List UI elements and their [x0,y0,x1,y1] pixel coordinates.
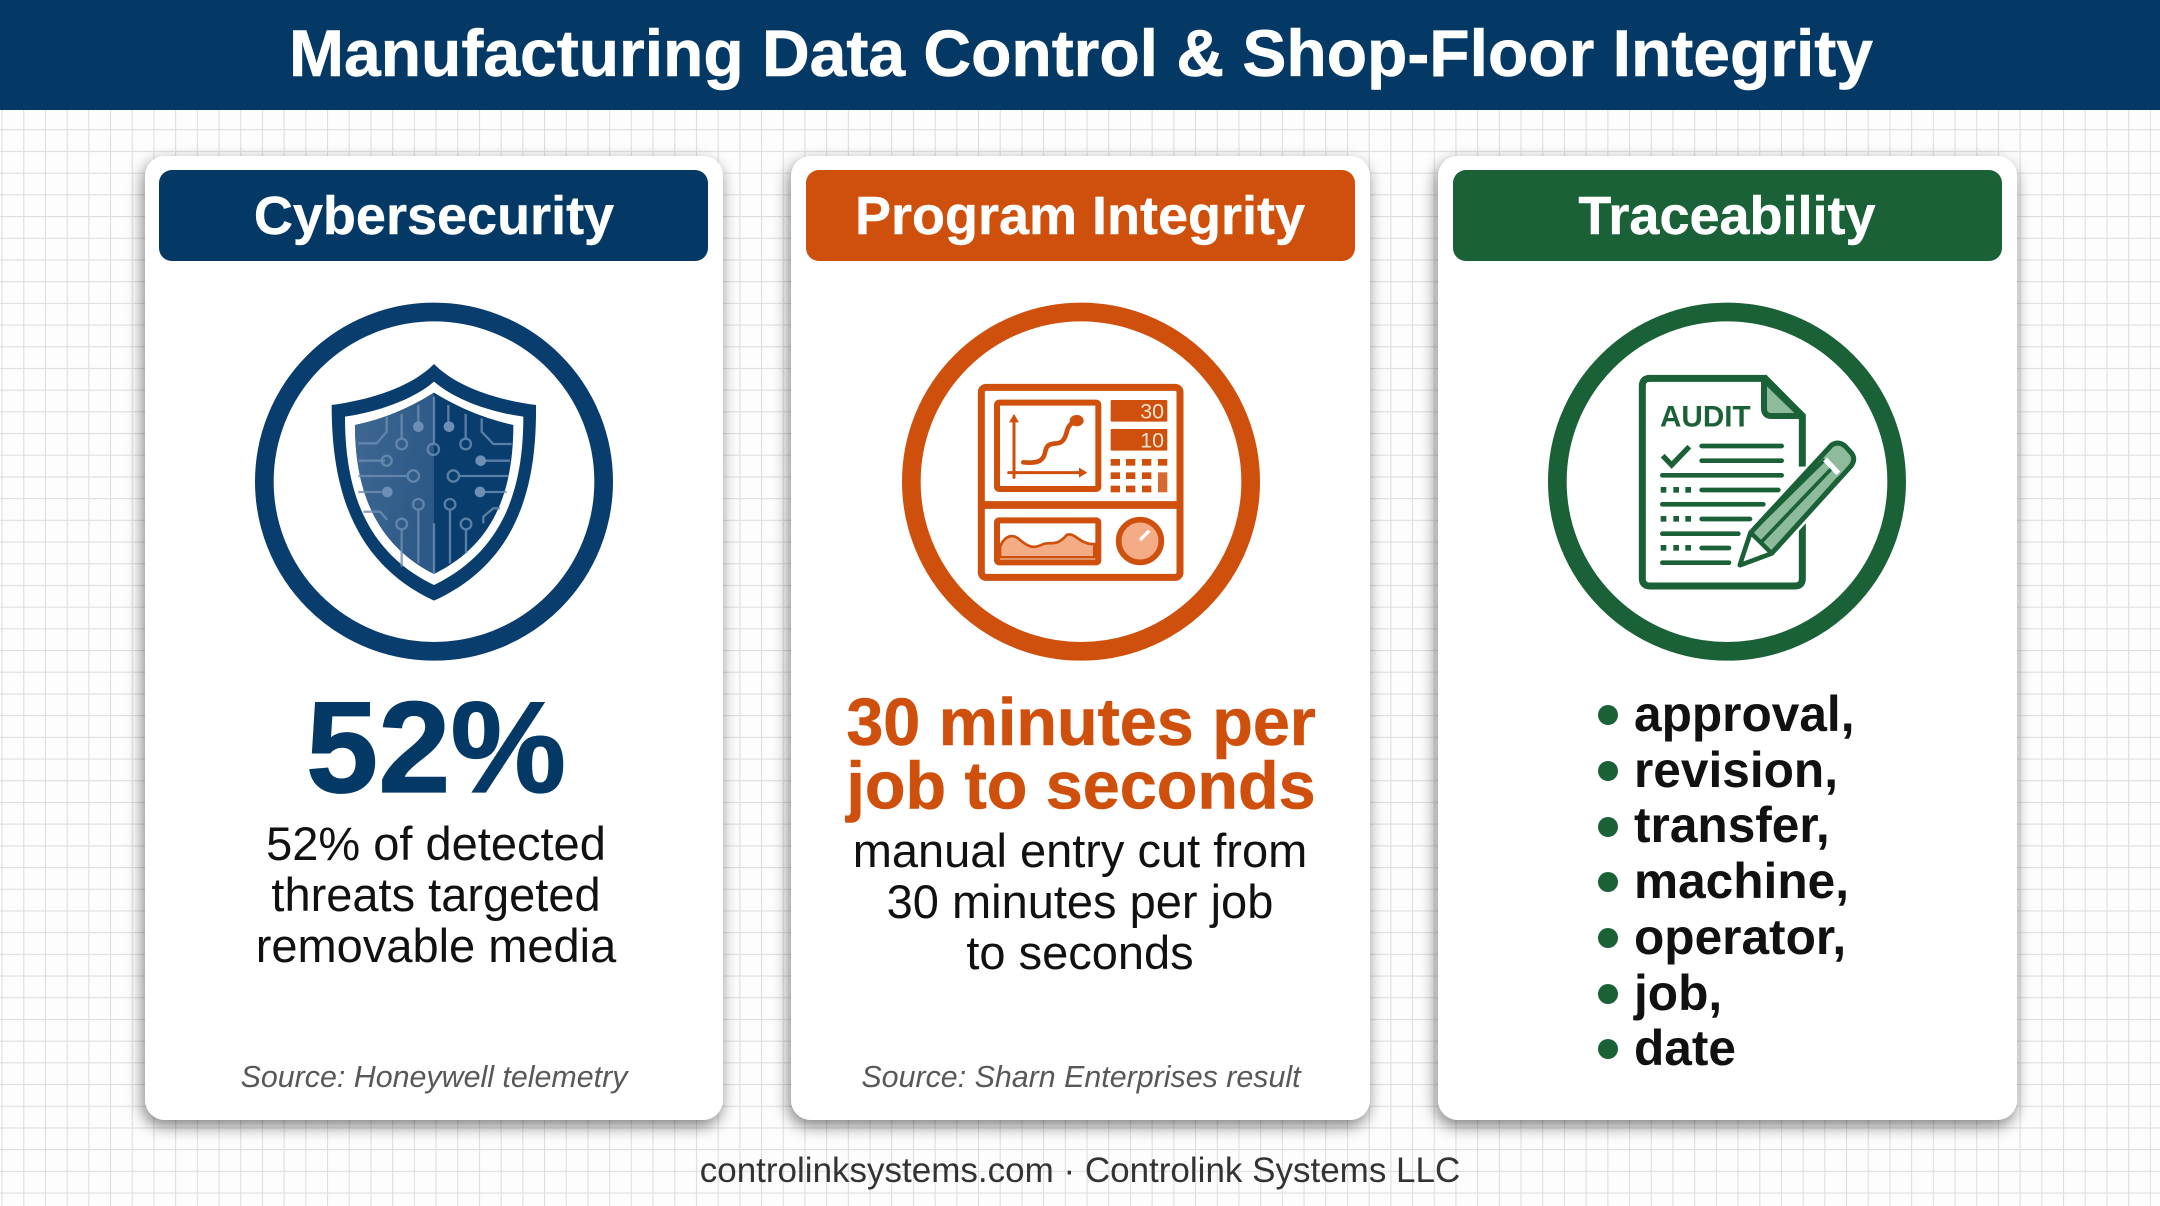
source: Source: Sharn Enterprises result [861,1060,1302,1094]
key stat: 30 minutes per [846,686,1316,760]
heading: Traceability: Traceability [1578,186,1876,246]
title: Manufacturing Data Control & Shop-Floor Integrity [289,16,1873,90]
description: to seconds [966,926,1194,979]
panel: Cybersecurity [145,156,723,1120]
traceability fields list [1598,686,1854,1076]
key stat: job to seconds [844,750,1316,824]
icon: shield in ring [264,312,604,651]
description: 52% of detected [266,817,606,870]
panel: Traceability [1438,156,2017,1120]
traceability fields list: machine, [1634,853,1849,909]
traceability fields list: approval, [1634,686,1854,742]
source: Source: Honeywell telemetry [241,1060,629,1094]
traceability fields list: transfer, [1634,797,1830,853]
display readouts [1140,400,1164,453]
footer: controlinksystems.com · Controlink Systems LLC [700,1151,1460,1190]
description: removable media [256,919,617,972]
panel: Program Integrity [791,156,1370,1120]
description: threats targeted [271,868,601,921]
traceability fields list: date [1634,1020,1736,1076]
heading: Cybersecurity: Cybersecurity [254,186,614,246]
description: 30 minutes per job [887,875,1273,928]
icon: audit document and pencil in ring [1557,312,1897,651]
description: manual entry cut from [853,824,1307,877]
traceability fields list: revision, [1634,742,1838,798]
heading: Program Integrity: Program Integrity [855,186,1305,246]
traceability fields list: job, [1633,965,1722,1021]
header banner [0,0,2160,110]
heading: Traceability [1453,170,2002,261]
icon: CNC control panel in ring [911,312,1251,651]
heading: Program Integrity [806,170,1355,261]
display readouts: 30 [1140,400,1164,424]
icon: audit document and pencil in ring: AUDIT [1660,401,1751,434]
display readouts: 10 [1140,429,1164,453]
big stat: 52% [306,674,566,820]
traceability fields list: operator, [1634,909,1846,965]
heading: Cybersecurity [159,170,708,261]
